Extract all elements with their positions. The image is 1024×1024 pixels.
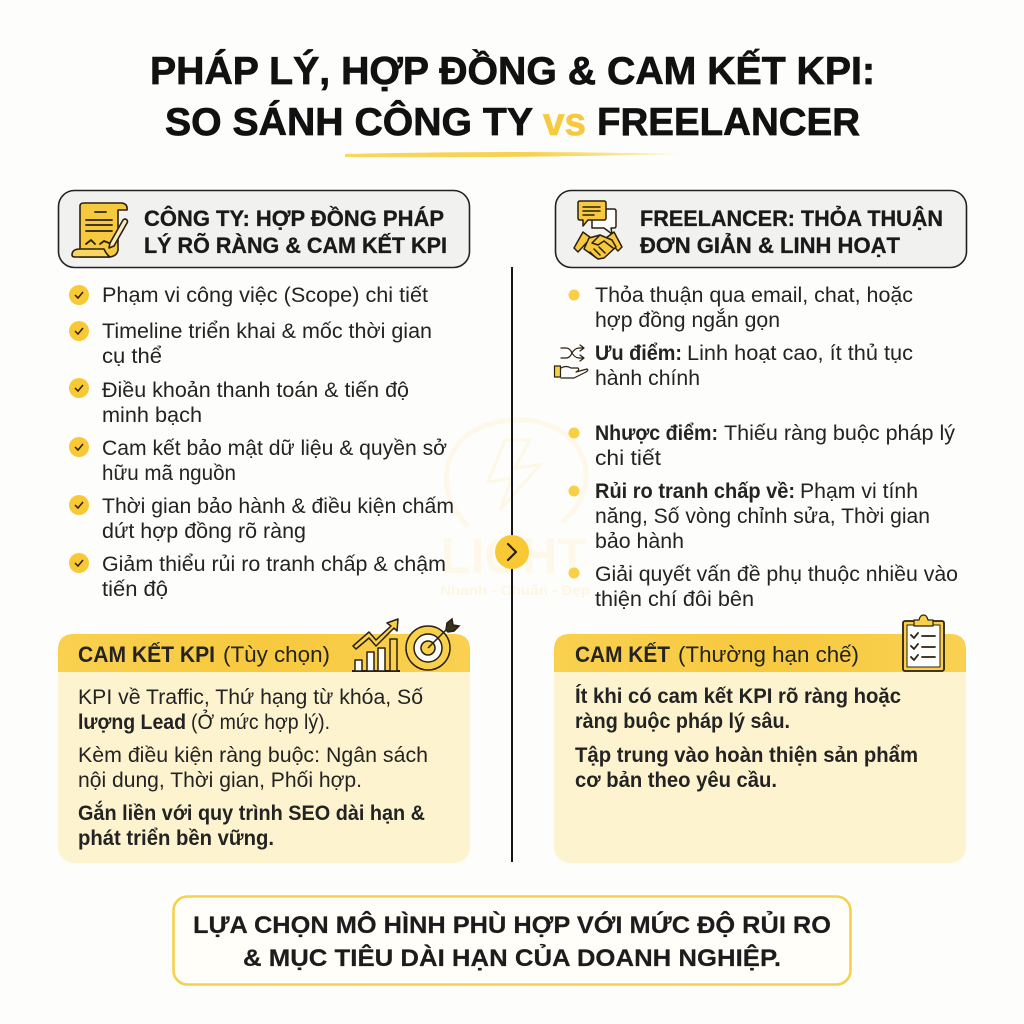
panel: freelancer commitment: Ít khi có cam kết KPI rõ ràng hoặc: [575, 683, 901, 708]
list: freelancer: Nhược điểm:: [595, 421, 718, 445]
icon: contract scroll: [72, 203, 128, 257]
checklist: company: [69, 283, 454, 601]
list: freelancer: hợp đồng ngắn gọn: [595, 307, 780, 332]
checklist: company: Điều khoản thanh toán & tiến độ: [102, 378, 409, 402]
panel: company heading: LÝ RÕ RÀNG & CAM KẾT KPI: [144, 233, 447, 258]
panel: freelancer heading: FREELANCER: THỎA THUẬN: [640, 206, 943, 231]
checklist: company: dứt hợp đồng rõ ràng: [102, 519, 306, 543]
panel: KPI commitment: phát triển bền vững.: [78, 826, 274, 850]
list: freelancer: thiện chí đôi bên: [595, 587, 754, 611]
title: SO SÁNH CÔNG TY: [165, 99, 533, 144]
panel: KPI commitment: lượng Lead: [78, 710, 186, 734]
checklist: company: hữu mã nguồn: [102, 461, 236, 485]
panel: KPI commitment: CAM KẾT KPI: [78, 642, 215, 667]
list: freelancer: Thiếu ràng buộc pháp lý: [724, 421, 955, 445]
title underline: [345, 152, 680, 157]
checklist: company: minh bạch: [102, 403, 202, 427]
list: freelancer: năng, Số vòng chỉnh sửa, Thời gian: [595, 504, 930, 528]
checklist: company: Cam kết bảo mật dữ liệu & quyền sở: [102, 436, 447, 460]
panel: KPI commitment: nội dung, Thời gian, Phối hợp.: [78, 768, 362, 792]
checklist: company: cụ thể: [102, 344, 162, 368]
center divider: [511, 267, 513, 862]
title: [150, 49, 875, 144]
panel: freelancer commitment: cơ bản theo yêu cầu.: [575, 768, 777, 792]
panel: company heading: [58, 190, 470, 268]
panel: freelancer commitment: (Thường hạn chế): [678, 642, 859, 667]
icon: check bullets: [69, 285, 89, 573]
list: freelancer: Giải quyết vấn đề phụ thuộc nhiều vào: [595, 562, 958, 586]
checklist: company: Timeline triển khai & mốc thời gian: [102, 319, 432, 343]
footer callout: & MỤC TIÊU DÀI HẠN CỦA DOANH NGHIỆP.: [243, 943, 781, 972]
panel: freelancer commitment: [554, 615, 966, 863]
title: vs: [543, 101, 586, 144]
panel: KPI commitment: Kèm điều kiện ràng buộc: Ngân sách: [78, 743, 428, 767]
watermark logo: [440, 420, 590, 598]
title: PHÁP LÝ, HỢP ĐỒNG & CAM KẾT KPI:: [150, 49, 875, 93]
icon: chat and handshake: [574, 201, 622, 259]
panel: KPI commitment: [58, 619, 470, 863]
list: freelancer: chi tiết: [595, 446, 661, 470]
icon: clipboard: [903, 615, 944, 671]
panel: KPI commitment: (Ở mức hợp lý).: [191, 709, 330, 734]
panel: freelancer commitment: ràng buộc pháp lý sâu.: [575, 709, 790, 733]
panel: KPI commitment: Gắn liền với quy trình SEO dài hạn &: [78, 800, 425, 825]
footer callout: LỰA CHỌN MÔ HÌNH PHÙ HỢP VỚI MỨC ĐỘ RỦI RO: [193, 910, 831, 939]
list: freelancer: Linh hoạt cao, ít thủ tục: [687, 341, 913, 365]
icon: target: [406, 619, 459, 670]
checklist: company: tiến độ: [102, 577, 168, 601]
footer callout: [174, 896, 850, 984]
list: freelancer: Rủi ro tranh chấp về:: [595, 479, 795, 503]
arrow button: [495, 535, 529, 569]
list: freelancer: Phạm vi tính: [800, 479, 918, 503]
panel: freelancer commitment: CAM KẾT: [575, 642, 671, 667]
watermark logo: Nhanh - Chuẩn - Đẹp: [440, 582, 590, 598]
panel: freelancer heading: [556, 190, 966, 268]
list: freelancer: bảo hành: [595, 529, 684, 553]
list: freelancer: Thỏa thuận qua email, chat, hoặc: [595, 283, 913, 307]
panel: KPI commitment: KPI về Traffic, Thứ hạng từ khóa, Số: [78, 685, 423, 709]
title: FREELANCER: [597, 101, 860, 144]
icon: growth chart: [352, 619, 400, 671]
list: freelancer: Ưu điểm:: [595, 341, 682, 365]
list: freelancer: hành chính: [595, 366, 700, 390]
list: freelancer: [554, 283, 958, 611]
checklist: company: Giảm thiểu rủi ro tranh chấp & chậm: [102, 552, 446, 576]
checklist: company: Thời gian bảo hành & điều kiện chấm: [102, 494, 454, 518]
icon: shuffle and open hand: [554, 345, 588, 378]
checklist: company: Phạm vi công việc (Scope) chi tiết: [102, 283, 428, 307]
panel: KPI commitment: (Tùy chọn): [223, 642, 330, 667]
icon: yellow dots: [568, 290, 580, 578]
panel: company heading: CÔNG TY: HỢP ĐỒNG PHÁP: [144, 206, 444, 231]
watermark logo: LIGHT: [441, 528, 587, 584]
panel: freelancer commitment: Tập trung vào hoàn thiện sản phẩm: [575, 743, 918, 767]
panel: freelancer heading: ĐƠN GIẢN & LINH HOẠT: [640, 233, 900, 258]
